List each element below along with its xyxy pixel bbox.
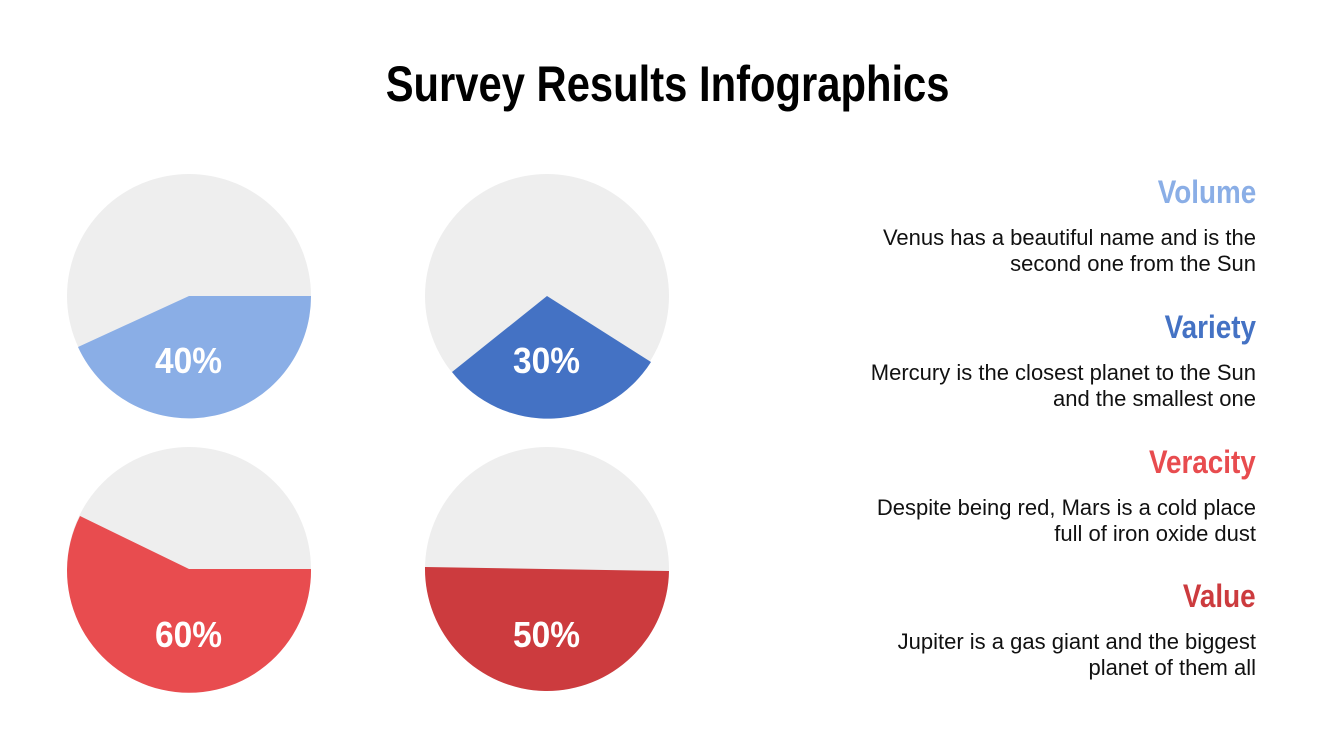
text: Value bbox=[898, 578, 1256, 680]
pie: 60%: 60% bbox=[155, 614, 222, 655]
text: Veracity: full of iron oxide dust bbox=[1054, 521, 1256, 546]
text: Value: planet of them all bbox=[1088, 655, 1256, 680]
text: Variety: and the smallest one bbox=[1053, 386, 1256, 411]
pie: 50%: 50% bbox=[513, 614, 580, 655]
pie: 60% bbox=[67, 447, 311, 693]
text: Veracity: Despite being red, Mars is a cold place bbox=[877, 495, 1256, 520]
title: Survey Results Infographics bbox=[386, 56, 950, 112]
text: Volume bbox=[883, 174, 1256, 276]
text: Veracity bbox=[877, 444, 1256, 546]
pie: 40%: 40% bbox=[155, 340, 222, 381]
text: Variety: Variety bbox=[1165, 309, 1256, 345]
pie: 30% bbox=[425, 174, 669, 419]
text: Volume: second one from the Sun bbox=[1010, 251, 1256, 276]
text: Volume: Venus has a beautiful name and is the bbox=[883, 225, 1256, 250]
text: Variety: Mercury is the closest planet to the Sun bbox=[871, 360, 1256, 385]
text: Value: Value bbox=[1183, 578, 1256, 614]
pie charts bbox=[67, 174, 669, 693]
text: Variety bbox=[871, 309, 1256, 411]
text: Volume: Volume bbox=[1158, 174, 1256, 210]
text: Value: Jupiter is a gas giant and the biggest bbox=[898, 629, 1256, 654]
pie: 50% bbox=[425, 447, 669, 691]
pie: 30%: 30% bbox=[513, 340, 580, 381]
pie: 40% bbox=[67, 174, 311, 418]
text: Veracity: Veracity bbox=[1149, 444, 1256, 480]
